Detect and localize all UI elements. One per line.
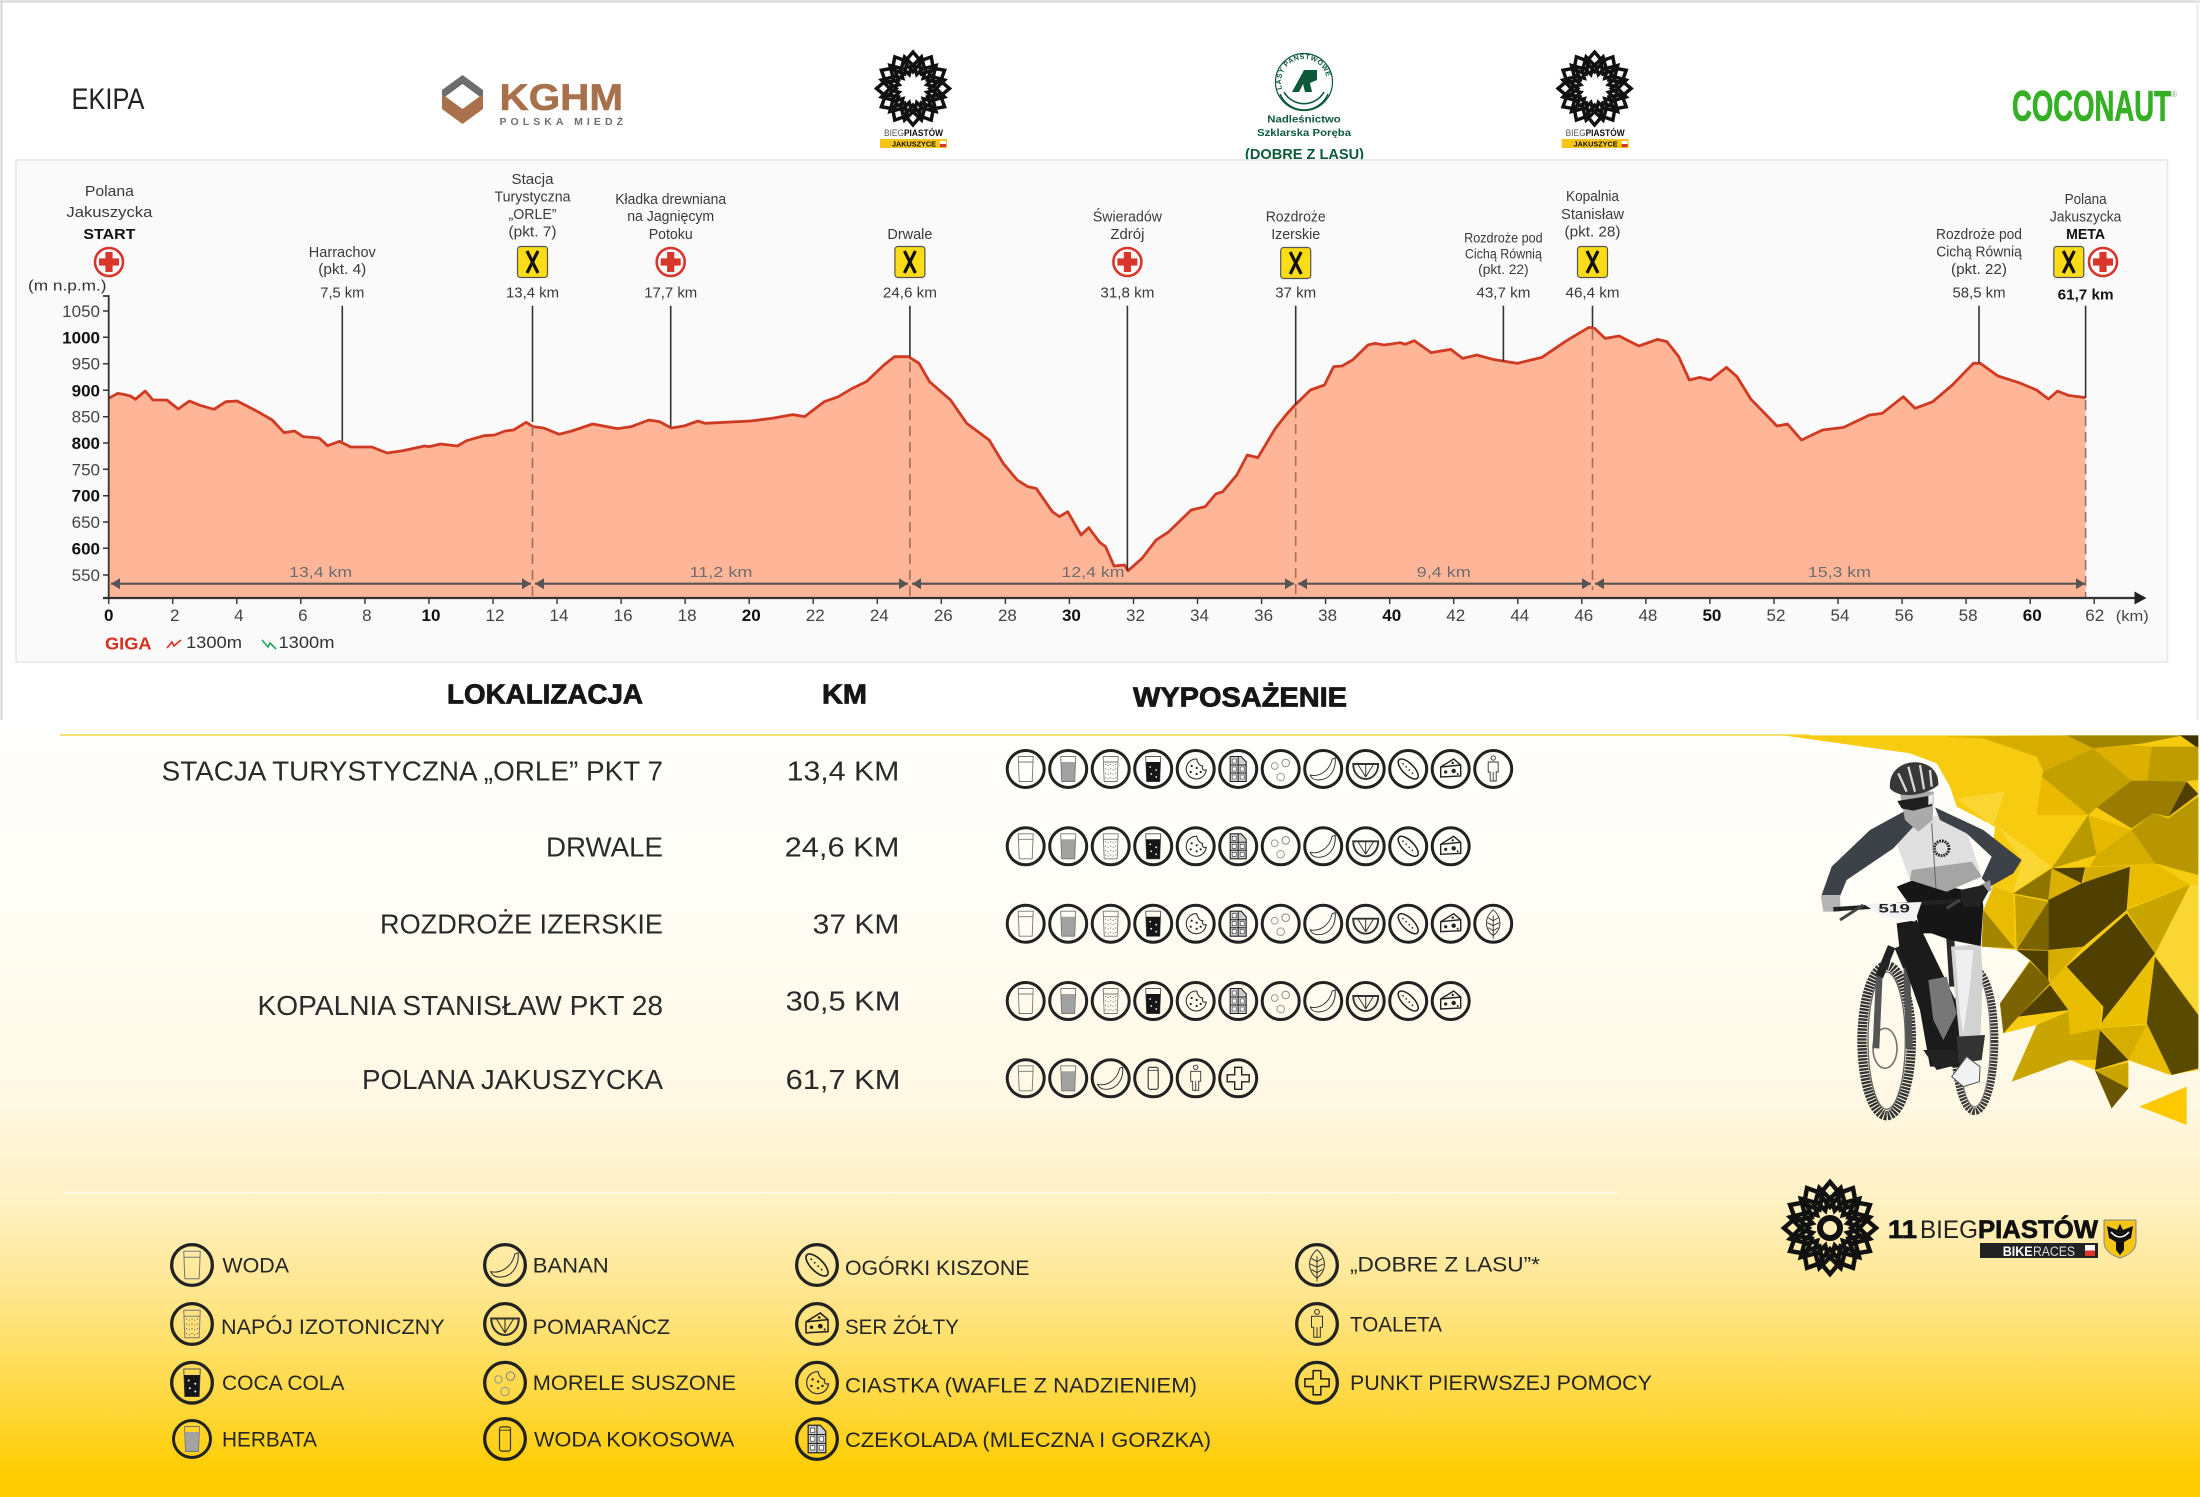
marker: Harrachov bbox=[309, 244, 376, 302]
table headings bbox=[447, 678, 1347, 713]
arrows: segment distances: 13,4 km bbox=[289, 564, 352, 581]
logo: KGHM: POLSKA MIEDŻ bbox=[500, 115, 624, 128]
logo: Bieg Piastów Jakuszyce (second): BIEGPIASTÓW bbox=[1566, 127, 1625, 139]
divider line under headings bbox=[60, 734, 1810, 736]
marker: Rozdroże pod Cichą Równią 43,7: Cichą Równią bbox=[1465, 245, 1542, 261]
x axis: 58 bbox=[1959, 606, 1978, 625]
x axis: 48 bbox=[1638, 606, 1657, 625]
marker: Kopalnia Stanisław: 46,4 km bbox=[1566, 285, 1620, 302]
y axis: 950 bbox=[72, 355, 100, 374]
marker: Stacja Turystyczna Orle bbox=[494, 171, 571, 302]
front wheel bbox=[1862, 966, 1911, 1116]
x axis: 32 bbox=[1126, 606, 1145, 625]
y axis: 850 bbox=[72, 408, 100, 427]
rider torso bbox=[1893, 815, 1982, 892]
legend item: pomarańcz bbox=[485, 1304, 670, 1344]
marker: Polana Jakuszycka META: Jakuszycka bbox=[2050, 209, 2122, 226]
arrows: segment distances bbox=[111, 564, 2085, 589]
arrows: segment distances: 9,4 km bbox=[1417, 564, 1471, 581]
marker: Kładka drewniana: Kładka drewniana bbox=[615, 191, 727, 208]
y axis: 1000 bbox=[62, 328, 100, 347]
logo: Bieg Piastów Jakuszyce (second): JAKUSZYCE bbox=[1574, 140, 1618, 148]
x axis: 2 bbox=[170, 606, 179, 625]
x axis: 6 bbox=[298, 606, 308, 625]
row: Stacja Turystyczna Orle: STACJA TURYSTYCZNA „ORLE” PKT 7 bbox=[162, 756, 663, 787]
x axis: 50 bbox=[1702, 606, 1721, 625]
legend item: banan: BANAN bbox=[533, 1255, 609, 1278]
x axis: 20 bbox=[742, 606, 761, 625]
marker: Rozdroże pod Cichą Równią 43,7: (pkt. 22) bbox=[1478, 261, 1529, 277]
logo: Coconaut: ® bbox=[2171, 90, 2177, 99]
marker: Rozdroże Izerskie bbox=[1266, 209, 1326, 302]
y axis: 750 bbox=[72, 460, 100, 479]
marker: Polana Jakuszycka START: Polana bbox=[85, 183, 135, 200]
chart: elevation area bbox=[109, 327, 2086, 598]
marker: Kopalnia Stanisław: Kopalnia bbox=[1566, 188, 1620, 205]
legend item: punkt pierwszej pomocy bbox=[1297, 1362, 1652, 1403]
legend: GIGA climb and descent bbox=[105, 633, 334, 653]
x axis: 46 bbox=[1574, 606, 1593, 625]
marker: Rozdroże Izerskie: 37 km bbox=[1275, 285, 1316, 302]
x axis: 14 bbox=[550, 606, 568, 625]
illustration: mountain biker bbox=[1821, 762, 2022, 1116]
logo: 11 Bieg Piastów Bike Races bbox=[1784, 1182, 2136, 1274]
rider legs bbox=[1897, 880, 1985, 1087]
x axis: 56 bbox=[1895, 606, 1914, 625]
x axis: 42 bbox=[1446, 606, 1465, 625]
x axis: 18 bbox=[678, 606, 697, 625]
y axis: 800 bbox=[72, 434, 100, 453]
legend item: ogórki kiszone bbox=[797, 1245, 1029, 1285]
x axis: 34 bbox=[1190, 606, 1209, 625]
x axis: 36 bbox=[1254, 606, 1273, 625]
marker: Stacja Turystyczna Orle: Turystyczna bbox=[494, 189, 571, 206]
x axis: 38 bbox=[1318, 606, 1337, 625]
marker: Polana Jakuszycka START: START bbox=[83, 226, 135, 243]
row: Drwale bbox=[546, 828, 1469, 865]
legend item: woda kokosowa bbox=[485, 1419, 734, 1459]
marker: Polana Jakuszycka START: Jakuszycka bbox=[66, 204, 153, 221]
marker: Rozdroże pod Cichą Równią 43,7: 43,7 km bbox=[1476, 285, 1530, 302]
logo: KGHM bbox=[442, 75, 624, 128]
x axis: 62 bbox=[2085, 606, 2104, 625]
divider above legend bbox=[63, 1192, 1618, 1194]
logo: Bieg Piastów Jakuszyce bbox=[877, 52, 949, 148]
marker: Kładka drewniana: Potoku bbox=[649, 226, 693, 243]
rider head and helmet bbox=[1890, 762, 1938, 832]
arrows: segment distances: 11,2 km bbox=[690, 564, 752, 581]
marker: Kładka drewniana: 17,7 km bbox=[644, 285, 697, 302]
legend item: pomarańcz: POMARAŃCZ bbox=[533, 1316, 670, 1339]
marker: Rozdroże pod Cichą Równią 43,7: Rozdroże pod bbox=[1464, 230, 1543, 246]
handlebar and race plate: 519 bbox=[1878, 901, 1911, 915]
x axis: 26 bbox=[934, 606, 953, 625]
legend item: napój izotoniczny: NAPÓJ IZOTONICZNY bbox=[221, 1316, 445, 1339]
x axis: 40 bbox=[1382, 606, 1401, 625]
logo: Bieg Piastów Jakuszyce: BIEGPIASTÓW bbox=[884, 127, 943, 139]
x axis: 44 bbox=[1510, 606, 1529, 625]
legend: GIGA climb and descent: GIGA bbox=[105, 633, 152, 653]
marker: Kopalnia Stanisław: Stanisław bbox=[1561, 206, 1624, 223]
legend: GIGA climb and descent: 1300m bbox=[278, 634, 334, 652]
logo: Bieg Piastów Jakuszyce: JAKUSZYCE bbox=[892, 140, 936, 148]
x axis: 10 bbox=[422, 606, 440, 625]
marker: Rozdroże pod Cichą Równią 58,5: (pkt. 22) bbox=[1951, 261, 2007, 278]
legend item: punkt pierwszej pomocy: PUNKT PIERWSZEJ POMOCY bbox=[1350, 1372, 1652, 1395]
marker: Rozdroże pod Cichą Równią 43,7 bbox=[1464, 230, 1543, 302]
legend item: coca cola: COCA COLA bbox=[222, 1372, 344, 1395]
x axis: 52 bbox=[1767, 606, 1785, 625]
x axis: (km) bbox=[2116, 608, 2149, 625]
legend: equipment icons bbox=[172, 1245, 1652, 1459]
y axis: 550 bbox=[72, 566, 100, 585]
marker: Drwale bbox=[883, 226, 937, 302]
marker: Stacja Turystyczna Orle: Stacja bbox=[512, 171, 554, 188]
marker: Świeradów Zdrój bbox=[1093, 208, 1162, 302]
table headings: WYPOSAŻENIE bbox=[1133, 682, 1347, 713]
marker: Rozdroże pod Cichą Równią 58,5 bbox=[1936, 226, 2022, 302]
marker: Świeradów Zdrój: Świeradów bbox=[1093, 208, 1162, 226]
row: Polana Jakuszycka: 61,7 KM bbox=[786, 1064, 900, 1095]
logo: 11 Bieg Piastów Bike Races: 11 bbox=[1888, 1216, 1917, 1244]
marker: Kopalnia Stanisław bbox=[1561, 188, 1624, 302]
handlebar and race plate bbox=[1833, 900, 1970, 922]
logo: 11 Bieg Piastów Bike Races: BIKE bbox=[2003, 1244, 2033, 1259]
x axis: 12 bbox=[486, 606, 504, 625]
legend item: toaleta bbox=[1297, 1304, 1442, 1344]
x axis bbox=[103, 592, 2149, 625]
y axis: 600 bbox=[72, 539, 100, 558]
x axis: 0 bbox=[104, 606, 113, 625]
marker: Rozdroże Izerskie: Rozdroże bbox=[1266, 209, 1326, 226]
marker: Polana Jakuszycka META: Polana bbox=[2065, 191, 2107, 208]
marker: Rozdroże pod Cichą Równią 58,5: Cichą Równią bbox=[1936, 244, 2022, 261]
marker: Rozdroże Izerskie: Izerskie bbox=[1271, 226, 1320, 243]
logo: Lasy Państwowe Nadleśnictwo Szklarska Poręba bbox=[1245, 52, 1364, 163]
arrows: segment distances: 12,4 km bbox=[1062, 564, 1124, 581]
table: aid stations bbox=[162, 750, 1512, 1097]
marker: Rozdroże pod Cichą Równią 58,5: Rozdroże pod bbox=[1936, 226, 2022, 243]
marker: Drwale: Drwale bbox=[887, 226, 932, 243]
x axis: 28 bbox=[998, 606, 1017, 625]
legend item: morele suszone bbox=[485, 1362, 736, 1403]
logo: KGHM: KGHM bbox=[500, 77, 623, 118]
marker: Świeradów Zdrój: Zdrój bbox=[1110, 226, 1144, 243]
x axis: 60 bbox=[2023, 606, 2042, 625]
marker: Stacja Turystyczna Orle: 13,4 km bbox=[506, 285, 559, 302]
logo: 11 Bieg Piastów Bike Races: PIASTÓW bbox=[1978, 1214, 2098, 1244]
row: Drwale: DRWALE bbox=[546, 832, 663, 863]
legend item: toaleta: TOALETA bbox=[1350, 1314, 1442, 1337]
legend item: woda kokosowa: WODA KOKOSOWA bbox=[534, 1429, 734, 1452]
row: Drwale: 24,6 KM bbox=[785, 832, 899, 863]
x axis: 16 bbox=[614, 606, 633, 625]
x axis: 22 bbox=[806, 606, 825, 625]
marker: Stacja Turystyczna Orle: (pkt. 7) bbox=[508, 224, 556, 241]
marker: Rozdroże pod Cichą Równią 58,5: 58,5 km bbox=[1952, 285, 2006, 302]
legend item: dobre z lasu: „DOBRE Z LASU”* bbox=[1350, 1254, 1540, 1277]
arrows: segment distances: 15,3 km bbox=[1808, 564, 1871, 581]
marker: Stacja Turystyczna Orle: „ORLE” bbox=[508, 206, 556, 223]
marker: Polana Jakuszycka START bbox=[66, 183, 153, 276]
rear wheel bbox=[1955, 970, 1995, 1111]
logo: Lasy Państwowe Nadleśnictwo Szklarska Poręba: (DOBRE Z LASU) bbox=[1245, 146, 1364, 163]
legend item: ser żółty: SER ŻÓŁTY bbox=[845, 1316, 959, 1339]
marker: Kładka drewniana bbox=[615, 191, 727, 302]
logo: Lasy Państwowe Nadleśnictwo Szklarska Poręba: Nadleśnictwo bbox=[1267, 114, 1341, 126]
x axis: 4 bbox=[234, 606, 244, 625]
marker: Polana Jakuszycka META bbox=[2050, 191, 2122, 303]
row: Kopalnia Stanisław: 30,5 KM bbox=[786, 986, 900, 1017]
marker: Drwale: 24,6 km bbox=[883, 285, 937, 302]
row: Kopalnia Stanisław bbox=[258, 982, 1469, 1021]
y axis: (m n.p.m.) bbox=[28, 278, 106, 295]
y axis: 700 bbox=[72, 487, 100, 506]
marker: Świeradów Zdrój: 31,8 km bbox=[1100, 285, 1154, 302]
bike frame and fork bbox=[1876, 920, 1963, 1070]
legend item: herbata: HERBATA bbox=[222, 1429, 317, 1452]
logo: Bieg Piastów Jakuszyce (second) bbox=[1558, 52, 1631, 148]
row: Stacja Turystyczna Orle bbox=[162, 750, 1512, 788]
legend item: woda: WODA bbox=[222, 1255, 289, 1278]
legend item: ciastka bbox=[797, 1362, 1197, 1403]
marker: Polana Jakuszycka META: META bbox=[2066, 226, 2105, 243]
legend item: ser żółty bbox=[797, 1304, 959, 1344]
logo: 11 Bieg Piastów Bike Races: BIEG bbox=[1920, 1216, 1978, 1244]
legend item: ciastka: CIASTKA (WAFLE Z NADZIENIEM) bbox=[845, 1375, 1197, 1398]
row: Rozdroże Izerskie: ROZDROŻE IZERSKIE bbox=[380, 908, 663, 939]
marker lines bbox=[342, 306, 2086, 571]
marker: Harrachov: Harrachov bbox=[309, 244, 376, 261]
row: Kopalnia Stanisław: KOPALNIA STANISŁAW PKT 28 bbox=[258, 990, 663, 1021]
logo: Lasy Państwowe Nadleśnictwo Szklarska Poręba: Szklarska Poręba bbox=[1257, 127, 1351, 139]
y axis bbox=[28, 278, 109, 598]
row: Polana Jakuszycka bbox=[362, 1060, 1257, 1097]
legend item: banan bbox=[485, 1245, 609, 1285]
row: Polana Jakuszycka: POLANA JAKUSZYCKA bbox=[362, 1064, 663, 1095]
marker: Harrachov: (pkt. 4) bbox=[318, 261, 366, 278]
y axis: 1050 bbox=[62, 302, 100, 321]
marker: Polana Jakuszycka META: 61,7 km bbox=[2058, 286, 2114, 303]
marker: Kopalnia Stanisław: (pkt. 28) bbox=[1564, 224, 1620, 241]
x axis: 30 bbox=[1062, 606, 1081, 625]
decoration: low-poly yellow shape bbox=[1783, 735, 2198, 1125]
legend: GIGA climb and descent: 1300m bbox=[186, 634, 242, 652]
table headings: LOKALIZACJA bbox=[447, 678, 643, 709]
heading: EKIPA: EKIPA bbox=[72, 83, 144, 116]
legend item: czekolada bbox=[797, 1419, 1211, 1459]
sponsor header bbox=[72, 49, 2177, 163]
x axis: 24 bbox=[870, 606, 889, 625]
marker: Kładka drewniana: na Jagnięcym bbox=[627, 208, 714, 225]
legend item: napój izotoniczny bbox=[172, 1304, 445, 1344]
legend item: ogórki kiszone: OGÓRKI KISZONE bbox=[845, 1257, 1029, 1280]
y axis: 900 bbox=[72, 381, 100, 400]
y axis: 650 bbox=[72, 513, 100, 532]
row: Rozdroże Izerskie bbox=[380, 905, 1512, 942]
row: Rozdroże Izerskie: 37 KM bbox=[813, 908, 899, 939]
rider arms bbox=[1821, 807, 2022, 912]
legend item: dobre z lasu bbox=[1297, 1245, 1540, 1285]
row: Stacja Turystyczna Orle: 13,4 KM bbox=[787, 756, 899, 787]
table headings: KM bbox=[822, 678, 867, 709]
legend item: morele suszone: MORELE SUSZONE bbox=[533, 1372, 736, 1395]
x axis: 8 bbox=[362, 606, 372, 625]
legend item: woda bbox=[172, 1245, 289, 1285]
panel: elevation profile bbox=[16, 160, 2168, 662]
marker: Harrachov: 7,5 km bbox=[320, 285, 364, 302]
logo: 11 Bieg Piastów Bike Races: RACES bbox=[2033, 1244, 2075, 1259]
legend item: coca cola bbox=[172, 1362, 344, 1403]
logo: Lasy Państwowe Nadleśnictwo Szklarska Poręba: LASY PAŃSTWOWE bbox=[1276, 54, 1331, 90]
legend item: herbata bbox=[174, 1420, 317, 1458]
x axis: 54 bbox=[1831, 606, 1849, 625]
dashed segment dividers bbox=[532, 330, 2086, 597]
legend item: czekolada: CZEKOLADA (MLECZNA I GORZKA) bbox=[845, 1429, 1211, 1452]
